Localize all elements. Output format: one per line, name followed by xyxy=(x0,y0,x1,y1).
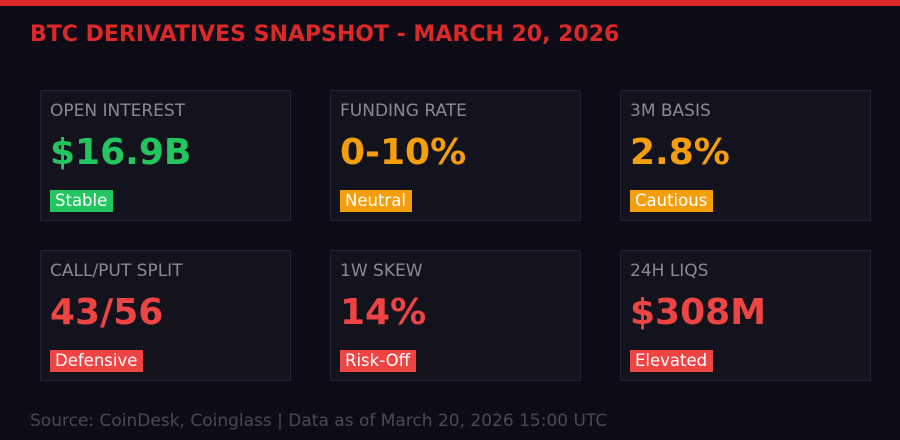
panel: 1w skew xyxy=(330,250,581,381)
label: 1W SKEW xyxy=(340,261,423,281)
panel: 24h liqs xyxy=(620,250,871,381)
value: 43/56 xyxy=(50,292,163,333)
badge: Stable xyxy=(55,191,107,210)
panel: funding rate xyxy=(330,90,581,221)
label: OPEN INTEREST xyxy=(50,101,185,121)
panel: 3m basis xyxy=(620,90,871,221)
label: 3M BASIS xyxy=(630,101,711,121)
value: 0-10% xyxy=(340,132,466,173)
panel: open interest xyxy=(40,90,291,221)
source footer: Source: CoinDesk, Coinglass | Data as of March 20, 2026 15:00 UTC xyxy=(30,411,607,431)
badge: Elevated xyxy=(635,351,707,370)
title: BTC DERIVATIVES SNAPSHOT - MARCH 20, 2026 xyxy=(30,22,619,47)
badge: Neutral xyxy=(345,191,406,210)
value: 14% xyxy=(340,292,426,333)
badge: Cautious xyxy=(635,191,707,210)
badge: Defensive xyxy=(55,351,137,370)
value: $308M xyxy=(630,292,766,333)
value: $16.9B xyxy=(50,132,191,173)
label: 24H LIQS xyxy=(630,261,708,281)
value: 2.8% xyxy=(630,132,730,173)
panel: call/put split xyxy=(40,250,291,381)
badge: Risk-Off xyxy=(345,351,410,370)
label: FUNDING RATE xyxy=(340,101,467,121)
label: CALL/PUT SPLIT xyxy=(50,261,183,281)
